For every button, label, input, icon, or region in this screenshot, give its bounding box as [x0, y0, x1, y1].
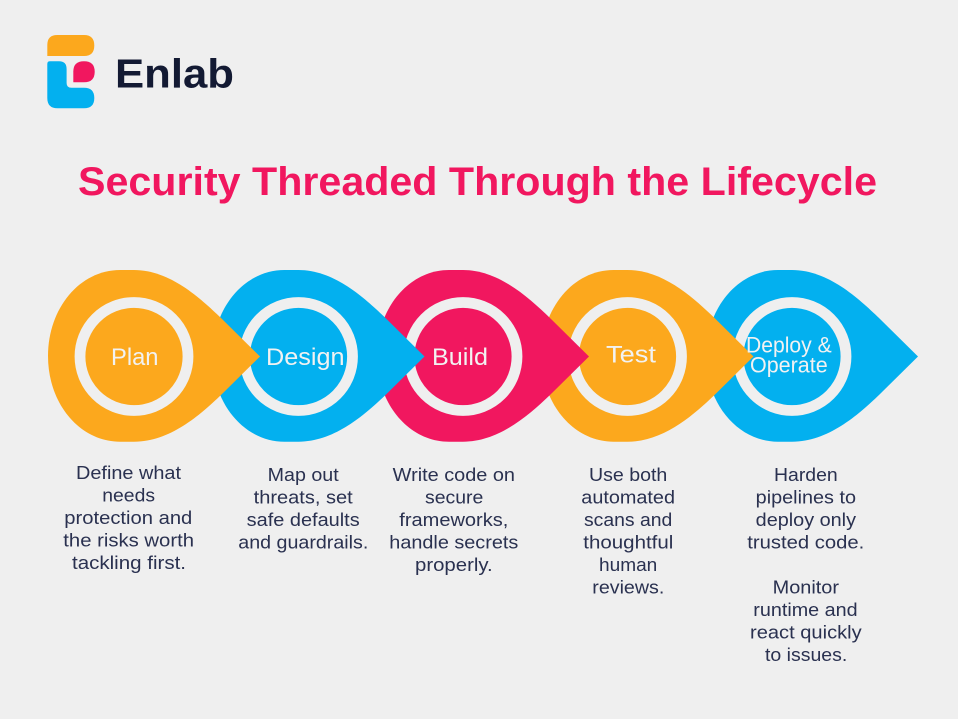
text block: Build description: properly. — [415, 555, 493, 575]
text block: Deploy & Operate description: Monitor — [773, 578, 839, 598]
text block: Deploy & Operate description: react quickly — [750, 622, 863, 642]
text block: Test description: automated — [581, 488, 675, 508]
step 1 drop: Plan — [48, 270, 260, 442]
text block: Deploy & Operate description: trusted code. — [747, 532, 864, 552]
step 2 drop: Design — [212, 270, 424, 442]
text block: Build description: handle secrets — [389, 532, 518, 552]
logo mark: orange bar — [47, 35, 94, 56]
text block: Design description: safe defaults — [247, 510, 360, 530]
text block: Plan description: tackling first. — [72, 553, 186, 573]
label: Deploy & Operate: Deploy & — [746, 332, 832, 357]
text block: Test description: thoughtful — [583, 532, 673, 552]
text block: Plan description — [63, 463, 194, 573]
text block: Plan description: the risks worth — [63, 530, 194, 550]
text block: Deploy & Operate description: Harden — [774, 465, 838, 485]
step 3 drop: Build — [377, 270, 589, 442]
logo mark: pink drop — [73, 61, 95, 82]
text block: Plan description: needs — [102, 486, 155, 506]
text block: Plan description: Define what — [76, 463, 181, 483]
text block: Build description — [389, 465, 518, 575]
label: Build: Build — [432, 344, 488, 371]
text block: Plan description: protection and — [64, 508, 192, 528]
text block: Test description: scans and — [584, 510, 672, 530]
label: Design: Design — [266, 344, 344, 371]
text block: Design description: Map out — [268, 465, 339, 485]
logo wordmark: Enlab — [115, 51, 234, 97]
text block: Build description: frameworks, — [399, 510, 508, 530]
label: Deploy & Operate — [746, 332, 832, 378]
text block: Design description — [238, 465, 368, 552]
text block: Build description: secure — [425, 488, 483, 508]
text block: Test description: human — [599, 555, 657, 575]
step 4 drop: Test — [542, 270, 754, 442]
text block: Design description: and guardrails. — [238, 532, 368, 552]
label: Plan: Plan — [111, 344, 158, 371]
text block: Deploy & Operate description — [747, 465, 864, 665]
text block: Test description — [581, 465, 675, 598]
text block: Test description: reviews. — [592, 578, 664, 598]
text block: Design description: threats, set — [254, 488, 353, 508]
title: Security Threaded Through the Lifecycle — [78, 160, 877, 204]
text block: Deploy & Operate description: deploy only — [756, 510, 857, 530]
logo mark: blue shape — [47, 61, 94, 108]
text block: Build description: Write code on — [393, 465, 515, 485]
label: Test: Test — [606, 342, 656, 369]
text block: Deploy & Operate description: runtime and — [753, 600, 858, 620]
step 5 drop: Deploy & Operate — [706, 270, 918, 442]
text block: Test description: Use both — [589, 465, 667, 485]
text block: Deploy & Operate description: to issues. — [765, 645, 847, 665]
logo: Enlab — [47, 35, 234, 108]
text block: Deploy & Operate description: pipelines to — [756, 488, 856, 508]
label: Deploy & Operate: Operate — [750, 353, 828, 378]
